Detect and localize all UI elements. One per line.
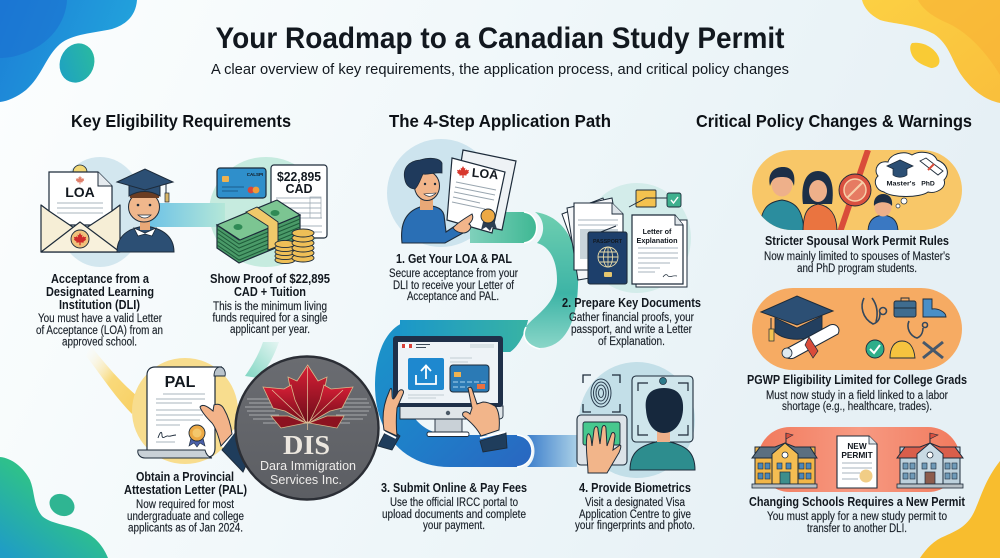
step 3 text: 3. Submit Online & Pay Fees bbox=[381, 480, 527, 495]
step 4 text: Application Centre to give bbox=[579, 509, 691, 521]
icon: documents and passport: Explanation bbox=[636, 236, 678, 245]
panel: key eligibility requirements bbox=[36, 111, 330, 534]
icon: money and proof of funds: CAD bbox=[285, 182, 313, 196]
step 1 text: Secure acceptance from your bbox=[389, 268, 518, 280]
icon: documents and passport: Letter of bbox=[643, 227, 672, 236]
logo: Dara Immigration Services: DIS bbox=[283, 430, 330, 460]
icon: LOA envelope and graduate bbox=[41, 165, 174, 252]
step 3 text: your payment. bbox=[423, 520, 485, 532]
step 3 text: Use the official IRCC portal to bbox=[390, 497, 518, 509]
requirement: provincial attestation letter: applicants as of Jan 2024. bbox=[128, 522, 243, 534]
policy text: spousal work permit: Now mainly limited to spouses of Master's bbox=[764, 251, 950, 263]
policy text: changing schools: Changing Schools Requires a New Permit bbox=[749, 494, 966, 509]
step 4 text bbox=[575, 480, 695, 532]
requirement: proof of funds: applicant per year. bbox=[230, 324, 310, 336]
step 2 text: Gather financial proofs, your bbox=[569, 312, 694, 324]
step 1 text: Acceptance and PAL. bbox=[407, 291, 499, 303]
pill: PGWP eligibility bbox=[752, 288, 962, 370]
icon: new permit document: PERMIT bbox=[841, 450, 873, 460]
icon: money and proof of funds bbox=[217, 165, 327, 264]
icon: money and proof of funds: $22,895 bbox=[277, 170, 321, 184]
icon: documents and passport bbox=[562, 190, 687, 287]
policy text: PGWP eligibility bbox=[747, 372, 967, 413]
policy text: spousal work permit: and PhD program students. bbox=[797, 263, 917, 275]
path ribbon bbox=[375, 139, 695, 478]
requirement: acceptance from a DLI: of Acceptance (LOA) from an bbox=[36, 325, 163, 337]
logo: Dara Immigration Services bbox=[236, 356, 378, 500]
step 2 text: of Explanation. bbox=[598, 336, 665, 348]
requirement: provincial attestation letter: Now required for most bbox=[136, 499, 235, 511]
pill: spousal work permit: Master's bbox=[886, 180, 916, 188]
step 4 text: 4. Provide Biometrics bbox=[579, 480, 691, 495]
requirement: proof of funds: This is the minimum living bbox=[213, 301, 327, 313]
requirement: provincial attestation letter: Attestation Letter (PAL) bbox=[124, 482, 247, 497]
step 3 text bbox=[381, 480, 527, 532]
icon: provincial attestation letter bbox=[132, 358, 252, 472]
policy text: PGWP eligibility: Must now study in a field linked to a labor bbox=[766, 390, 948, 402]
connector ribbon: eligibility bbox=[55, 157, 323, 414]
logo: Dara Immigration Services: Dara Immigration bbox=[260, 458, 356, 473]
step 1 text bbox=[389, 251, 518, 303]
pill: changing schools bbox=[752, 427, 963, 492]
policy text: PGWP eligibility: shortage (e.g., healthcare, trades). bbox=[782, 401, 932, 413]
icon: money and proof of funds: CALSPI bbox=[247, 172, 263, 177]
requirement: acceptance from a DLI: Acceptance from a bbox=[51, 271, 150, 286]
title: Your Roadmap to a Canadian Study Permit bbox=[216, 22, 784, 55]
panel: critical policy changes and warnings bbox=[696, 111, 972, 535]
step 2 text: 2. Prepare Key Documents bbox=[562, 295, 701, 310]
icon: new permit document: NEW bbox=[847, 441, 867, 451]
panel: the 4-step application path bbox=[375, 111, 701, 532]
policy text: changing schools bbox=[749, 494, 966, 535]
heading: key eligibility: Key Eligibility Requirements bbox=[71, 111, 291, 131]
icon: school blue bbox=[897, 433, 963, 488]
icon: provincial attestation letter: PAL bbox=[165, 374, 196, 391]
icon: LOA envelope and graduate: LOA bbox=[65, 184, 95, 200]
icon: new permit document bbox=[837, 436, 877, 488]
requirement: acceptance from a DLI: You must have a valid Letter bbox=[38, 313, 162, 325]
icon: biometrics fingerprint and face scan bbox=[577, 375, 695, 473]
requirement: acceptance from a DLI: approved school. bbox=[62, 336, 137, 348]
requirement: provincial attestation letter: undergraduate and college bbox=[127, 511, 244, 523]
requirement: proof of funds: Show Proof of $22,895 bbox=[210, 271, 330, 286]
step 4 text: your fingerprints and photo. bbox=[575, 520, 695, 532]
requirement: provincial attestation letter bbox=[124, 469, 247, 534]
requirement: acceptance from a DLI: Institution (DLI) bbox=[59, 297, 140, 312]
requirement: proof of funds: funds required for a single bbox=[212, 312, 328, 324]
icon: person holding LOA bbox=[402, 150, 516, 243]
heading: 4-step path: The 4-Step Application Path bbox=[389, 111, 611, 131]
step 2 text bbox=[562, 295, 701, 348]
subtitle: A clear overview of key requirements, the application process, and critical policy changes bbox=[211, 62, 789, 78]
icon: person holding LOA: LOA bbox=[471, 166, 499, 182]
step 1 text: 1. Get Your LOA & PAL bbox=[396, 251, 512, 266]
icon: documents and passport: PASSPORT bbox=[593, 239, 623, 245]
requirement: acceptance from a DLI bbox=[36, 271, 163, 348]
step 1 text: DLI to receive your Letter of bbox=[393, 280, 515, 292]
step 3 text: upload documents and complete bbox=[382, 509, 526, 521]
step 2 text: passport, and write a Letter bbox=[571, 324, 692, 336]
policy text: changing schools: You must apply for a new study permit to bbox=[767, 511, 947, 523]
requirement: acceptance from a DLI: Designated Learning bbox=[46, 284, 154, 299]
icon: online portal monitor with hands bbox=[378, 336, 507, 452]
policy text: spousal work permit: Stricter Spousal Work Permit Rules bbox=[765, 233, 949, 248]
policy text: changing schools: transfer to another DLI. bbox=[807, 523, 907, 535]
pill: spousal work permit: PhD bbox=[921, 180, 935, 188]
icon: school yellow bbox=[752, 433, 817, 488]
pill: spousal work permit bbox=[752, 150, 962, 232]
requirement: proof of funds bbox=[210, 271, 330, 336]
requirement: proof of funds: CAD + Tuition bbox=[234, 284, 306, 299]
logo: Dara Immigration Services: Services Inc. bbox=[270, 472, 342, 487]
policy text: spousal work permit bbox=[764, 233, 950, 275]
step 4 text: Visit a designated Visa bbox=[585, 497, 686, 509]
heading: critical policy changes: Critical Policy Changes & Warnings bbox=[696, 111, 972, 131]
requirement: provincial attestation letter: Obtain a Provincial bbox=[136, 469, 234, 484]
